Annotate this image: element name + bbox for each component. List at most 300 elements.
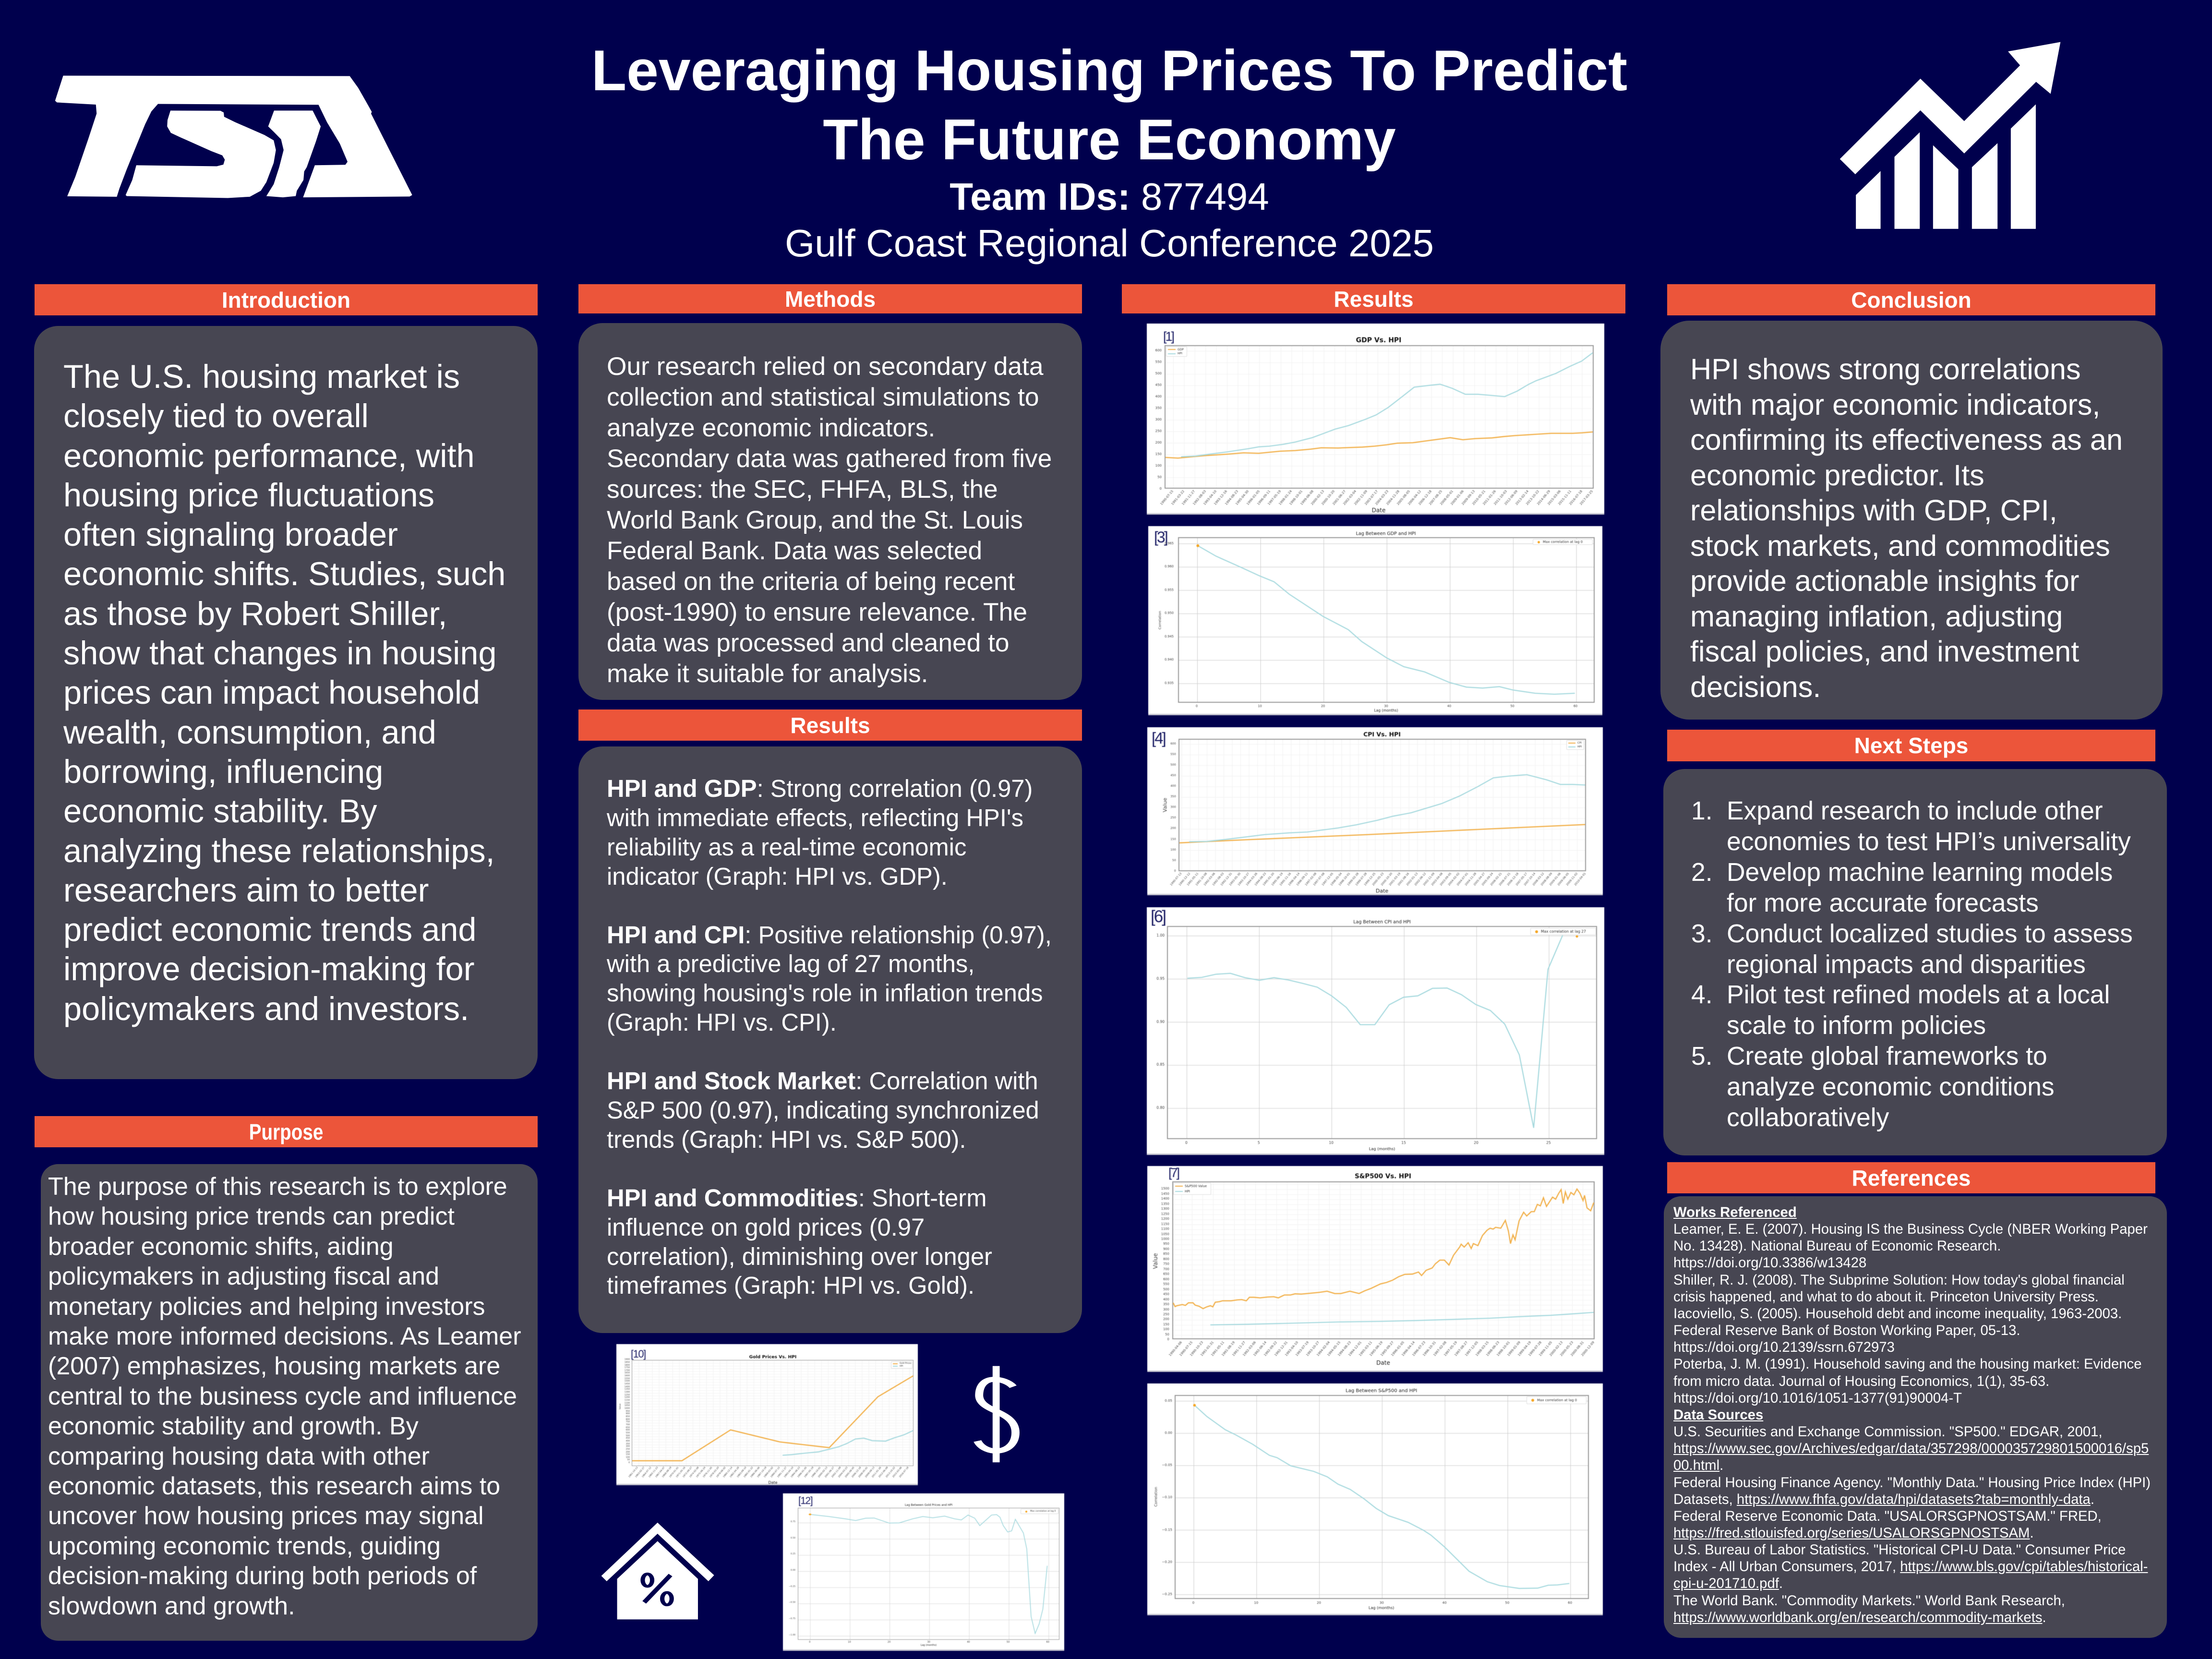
chart: lag between S&P500 and HPI: 40 [1443, 1601, 1447, 1605]
text: introduction body: prices can impact household [63, 674, 480, 711]
chart: gold prices vs HPI: 0 [628, 1462, 630, 1464]
chart: GDP vs HPI: 2002-11-09 [1353, 489, 1368, 506]
chart: lag between gold prices and HPI: 60 [1046, 1641, 1049, 1644]
chart: S&P500 vs HPI: 1993-04-10 [1285, 1340, 1299, 1357]
chart: lag between gold prices and HPI: Max correlation at lag 0 [1030, 1510, 1056, 1513]
panel: methods [578, 323, 1082, 700]
chart: CPI vs HPI: 1996-09-11 [1296, 872, 1309, 887]
chart: gold prices vs HPI: 50 [627, 1459, 630, 1461]
chart: GDP vs HPI: 2013-02-14 [1515, 489, 1529, 506]
panel: results [578, 746, 1082, 1333]
text: results body: (Graph: HPI vs. CPI). [607, 1009, 837, 1036]
chart: S&P500 vs HPI: 600 [1163, 1277, 1169, 1281]
text: results body: S&P 500 (0.97), indicating synchronized [607, 1096, 1039, 1124]
chart: lag between CPI and HPI: 0.85 [1156, 1062, 1165, 1067]
chart: lag between CPI and HPI: Lag Between CPI and HPI [1353, 919, 1411, 925]
text: references body: Datasets, https://www.fhfa.gov/data/hpi/datasets?tab=monthly-data. [1673, 1491, 2094, 1507]
chart: S&P500 vs HPI: 1991-11-27 [1232, 1340, 1246, 1357]
chart: GDP vs HPI: 450 [1155, 383, 1162, 387]
chart: S&P500 vs HPI: 1999-01-09 [1506, 1340, 1521, 1357]
chart: gold prices vs HPI: 1700 [625, 1370, 630, 1372]
chart: lag between gold prices and HPI: −0.75 [789, 1618, 795, 1620]
panel: purpose [41, 1164, 538, 1641]
chart: gold prices vs HPI: 2001-06-27 [824, 1467, 835, 1479]
chart: S&P500 vs HPI: 1990-10-23 [1190, 1340, 1204, 1357]
chart: lag between gold prices and HPI: 0.50 [791, 1537, 795, 1539]
chart: gold prices vs HPI: 700 [626, 1424, 630, 1426]
chart: gold prices vs HPI: 1100 [625, 1402, 630, 1405]
chart: S&P500 vs HPI: 1992-06-14 [1253, 1340, 1267, 1357]
text: purpose body: uncover how housing prices may signal [48, 1502, 484, 1530]
chart: GDP vs HPI: 2008-05-01 [1439, 489, 1454, 506]
text: results body: with a predictive lag of 27 months, [607, 950, 974, 977]
chart: GDP vs HPI: 2003-07-17 [1364, 489, 1379, 506]
text: methods body: sources: the SEC, FHFA, BLS, the [607, 475, 998, 504]
chart: gold prices vs HPI: 1968-08-19 [662, 1467, 673, 1479]
chart: GDP vs HPI: 2016-07-18 [1568, 489, 1583, 506]
chart: gold prices vs HPI: 1986-06-06 [750, 1467, 760, 1479]
text: methods body: collection and statistical simulations to [607, 383, 1039, 411]
panel: introduction [34, 326, 538, 1079]
chart: GDP vs HPI: 1990-07-15 [1160, 489, 1174, 506]
chart: gold prices vs HPI: 1980-12-14 [723, 1467, 733, 1479]
chart: gold prices vs HPI: Gold Prices Vs. HPI [749, 1354, 796, 1359]
chart: GDP vs HPI: 1998-01-24 [1278, 489, 1293, 506]
chart: CPI vs HPI: 1997-07-08 [1313, 872, 1326, 887]
chart: S&P500 vs HPI: 1400 [1161, 1197, 1169, 1201]
chart: lag between CPI and HPI: 1.00 [1156, 933, 1165, 938]
chart: gold prices vs HPI: 1989-03-02 [764, 1467, 774, 1479]
conference name: Gulf Coast Regional Conference 2025 [785, 222, 1434, 264]
chart: S&P500 vs HPI: 900 [1163, 1247, 1169, 1251]
chart: GDP vs HPI: 2012-06-09 [1504, 489, 1518, 506]
chart: gold prices vs HPI [616, 1344, 918, 1485]
chart: CPI vs HPI: HPI [1577, 745, 1582, 748]
chart: gold prices vs HPI: Date [768, 1480, 778, 1485]
chart: S&P500 vs HPI: 350 [1163, 1302, 1169, 1306]
chart: lag between GDP and HPI: Lag (months) [1374, 708, 1398, 712]
chart: CPI vs HPI: 1999-02-28 [1347, 872, 1359, 887]
chart: CPI vs HPI: 1993-05-30 [1229, 872, 1241, 887]
chart: gold prices vs HPI: 1979-08-02 [716, 1467, 727, 1479]
chart: lag between gold prices and HPI: 40 [967, 1641, 970, 1644]
text: results body: trends (Graph: HPI vs. S&P 500). [607, 1126, 966, 1153]
chart: GDP vs HPI: 2009-09-13 [1461, 489, 1476, 506]
text: introduction body: economic performance, with [63, 437, 475, 474]
chart: lag between gold prices and HPI: 0.75 [791, 1521, 795, 1523]
chart: lag between CPI and HPI: 15 [1401, 1141, 1406, 1145]
chart: GDP vs HPI: 1997-05-19 [1267, 489, 1282, 506]
chart: CPI vs HPI: 2002-06-12 [1414, 872, 1427, 887]
list: next steps items [1691, 797, 2133, 1132]
chart: CPI vs HPI: 0 [1174, 869, 1176, 873]
chart: S&P500 vs HPI: 1150 [1161, 1222, 1169, 1226]
chart: gold prices vs HPI: 950 [626, 1410, 630, 1413]
text: results body: HPI and Stock Market: Correlation with [607, 1067, 1038, 1094]
chart: S&P500 vs HPI: 1100 [1161, 1227, 1169, 1231]
chart: S&P500 vs HPI: 1992-09-22 [1263, 1340, 1278, 1357]
chart: GDP vs HPI: Date [1372, 507, 1385, 514]
text: purpose body: broader economic shifts, aiding [48, 1233, 394, 1261]
list: next steps items: 5. [1691, 1042, 1713, 1070]
chart: GDP vs HPI: 2002-03-04 [1343, 489, 1357, 506]
chart: lag between S&P500 and HPI: 0 [1192, 1601, 1194, 1605]
chart: CPI vs HPI: 2005-09-24 [1481, 872, 1494, 887]
text: purpose body: slowdown and growth. [48, 1592, 295, 1620]
chart: GDP vs HPI: 2015-03-06 [1547, 489, 1562, 506]
title: The Future Economy [823, 108, 1396, 172]
text: introduction body: wealth, consumption, and [63, 714, 436, 751]
chart: lag between GDP and HPI: 40 [1447, 704, 1451, 708]
text: references body: crisis happened, and what to do about it. Princeton University Press. [1673, 1289, 2099, 1305]
text: introduction body: often signaling broader [63, 516, 398, 553]
text: references body: https://fred.stlouisfed.org/series/USALORSGPNOSTSAM. [1673, 1525, 2034, 1541]
text: purpose body: policymakers in adjusting fiscal and [48, 1262, 439, 1290]
chart: GDP vs HPI: 1991-03-22 [1170, 489, 1185, 506]
chart: S&P500 vs HPI: 1999-11-05 [1538, 1340, 1553, 1357]
list: next steps items: scale to inform policies [1727, 1011, 1986, 1040]
chart: GDP vs HPI: 2000-02-13 [1310, 489, 1325, 506]
panel: references [1664, 1196, 2167, 1638]
text: results body: indicator (Graph: HPI vs. GDP). [607, 863, 948, 890]
text: references body: from micro data. Journal of Housing Economics, 1(1), 35-63. [1673, 1373, 2049, 1389]
text: conclusion body: HPI shows strong correlations [1690, 353, 2081, 385]
text: introduction body: analyzing these relationships, [63, 832, 495, 869]
chart: CPI vs HPI: 2005-04-27 [1473, 872, 1486, 887]
icon: house with percent [601, 1523, 714, 1620]
chart: gold prices vs HPI: 1750 [625, 1367, 630, 1369]
chart: CPI vs HPI: 1999-07-28 [1355, 872, 1368, 887]
chart: S&P500 vs HPI: 1991-08-19 [1221, 1340, 1236, 1357]
chart: lag between S&P500 and HPI: 0.00 [1165, 1431, 1172, 1435]
text: conclusion body [1690, 353, 2123, 703]
chart: S&P500 vs HPI: 1050 [1161, 1232, 1169, 1236]
heading: Conclusion [1667, 284, 2155, 315]
chart: lag between CPI and HPI [1147, 907, 1604, 1155]
chart: GDP vs HPI: 2014-06-29 [1536, 489, 1551, 506]
chart: CPI vs HPI: 2004-11-28 [1465, 872, 1478, 887]
chart: gold prices vs HPI: 2013-10-22 [885, 1467, 896, 1479]
chart: CPI vs HPI: 1997-02-08 [1305, 872, 1317, 887]
chart: S&P500 vs HPI: 2000-12-09 [1580, 1340, 1595, 1357]
text: methods body: World Bank Group, and the St. Louis [607, 506, 1023, 534]
text: conclusion body: economic predictor. Its [1690, 459, 1984, 492]
chart: gold prices vs HPI: 1998-10-01 [811, 1467, 821, 1479]
chart: GDP vs HPI: 100 [1155, 464, 1162, 468]
logo: TSA [55, 76, 412, 198]
chart: CPI vs HPI: 2002-01-13 [1406, 872, 1419, 887]
chart: gold prices vs HPI: 350 [626, 1443, 630, 1445]
text: purpose body: upcoming economic trends, guiding [48, 1532, 441, 1560]
text: introduction body: as those by Robert Shiller, [63, 595, 447, 632]
chart: GDP vs HPI: 2000-10-20 [1321, 489, 1335, 506]
chart: S&P500 vs HPI: 250 [1163, 1312, 1169, 1316]
chart: gold prices vs HPI: 1300 [625, 1391, 630, 1394]
chart: CPI vs HPI: 2009-11-02 [1566, 872, 1578, 887]
text: purpose body: The purpose of this research is to explore [48, 1173, 507, 1201]
chart: CPI vs HPI: 1995-01-20 [1262, 872, 1275, 887]
heading: Methods: Methods [785, 286, 876, 311]
chart: gold prices vs HPI: 1150 [625, 1399, 630, 1402]
chart: S&P500 vs HPI: 550 [1163, 1282, 1169, 1286]
text: references body: https://www.worldbank.org/en/research/commodity-markets. [1673, 1610, 2046, 1625]
title: Leveraging Housing Prices To Predict [591, 38, 1627, 103]
chart: GDP vs HPI: GDP [1178, 348, 1184, 351]
chart: S&P500 vs HPI: 450 [1163, 1292, 1169, 1296]
heading: Next Steps: Next Steps [1854, 733, 1968, 758]
chart: CPI vs HPI: 1998-05-04 [1330, 872, 1343, 887]
chart: lag between GDP and HPI: 0.940 [1165, 658, 1174, 661]
chart: GDP vs HPI: 250 [1155, 429, 1162, 433]
chart: S&P500 vs HPI: 1350 [1161, 1202, 1169, 1206]
panel: conclusion [1660, 321, 2163, 720]
chart: gold prices vs HPI: 800 [626, 1419, 630, 1421]
chart: lag between CPI and HPI: 0.95 [1156, 976, 1165, 981]
chart: lag between GDP and HPI: [3] [1154, 529, 1167, 546]
chart: CPI vs HPI: 1998-10-01 [1338, 872, 1351, 887]
chart: CPI vs HPI: 2003-04-08 [1431, 872, 1443, 887]
chart: lag between S&P500 and HPI: 0.05 [1165, 1399, 1172, 1403]
chart: CPI vs HPI: 1990-12-12 [1178, 872, 1191, 887]
chart: CPI vs HPI: 1993-10-27 [1238, 872, 1250, 887]
chart: GDP vs HPI: 2007-08-25 [1429, 489, 1443, 506]
chart: CPI vs HPI: 2008-08-09 [1540, 872, 1553, 887]
text: references body: The World Bank. "Commodity Markets." World Bank Research, [1673, 1593, 2065, 1609]
chart: GDP vs HPI: 1999-06-08 [1299, 489, 1314, 506]
chart: gold prices vs HPI: 1961-10-13 [628, 1467, 639, 1479]
list: next steps items: collaboratively [1727, 1104, 1889, 1132]
text: results body: HPI and Commodities: Short-term [607, 1184, 986, 1212]
chart: CPI vs HPI: 1992-08-03 [1212, 872, 1225, 887]
chart: gold prices vs HPI: 1971-05-16 [675, 1467, 686, 1479]
chart: S&P500 vs HPI: 1995-06-19 [1369, 1340, 1384, 1357]
chart: CPI vs HPI: 2003-09-05 [1440, 872, 1452, 887]
chart: GDP vs HPI: 2004-03-23 [1375, 489, 1389, 506]
chart: CPI vs HPI: 1994-08-23 [1254, 872, 1267, 887]
text: purpose body: comparing housing data with other [48, 1443, 430, 1470]
chart: gold prices vs HPI: 150 [626, 1454, 630, 1456]
chart: CPI vs HPI: 300 [1170, 805, 1176, 809]
chart: S&P500 vs HPI: HPI [1185, 1190, 1190, 1193]
chart: S&P500 vs HPI: 950 [1163, 1242, 1169, 1246]
chart: gold prices vs HPI: 1985-01-22 [743, 1467, 754, 1479]
chart: S&P500 vs HPI: 200 [1163, 1317, 1169, 1321]
text: introduction body: economic shifts. Studies, such [63, 555, 505, 592]
chart: CPI vs HPI: 1997-12-05 [1322, 872, 1334, 887]
chart: S&P500 vs HPI: 1998-03-15 [1475, 1340, 1490, 1357]
chart: S&P500 vs HPI: 1997-08-27 [1454, 1340, 1468, 1357]
chart: lag between S&P500 and HPI: 10 [1254, 1601, 1258, 1605]
chart: gold prices vs HPI: 2006-12-18 [852, 1467, 862, 1479]
chart: lag between CPI and HPI: 20 [1474, 1141, 1479, 1145]
text: conclusion body: managing inflation, adjusting [1690, 600, 2063, 633]
chart: CPI vs HPI: CPI Vs. HPI [1363, 731, 1401, 738]
chart: CPI vs HPI: 400 [1170, 784, 1176, 788]
chart: S&P500 vs HPI: 1990-07-15 [1179, 1340, 1193, 1357]
chart: gold prices vs HPI: 1200 [625, 1396, 630, 1399]
chart: lag between S&P500 and HPI: Lag Between S&P500 and HPI [1346, 1388, 1417, 1393]
text: methods body: data was processed and cleaned to [607, 629, 1010, 657]
chart: GDP vs HPI: 150 [1155, 452, 1162, 456]
text: purpose body: make more informed decisions. As Leamer [48, 1322, 521, 1350]
chart: lag between gold prices and HPI [783, 1493, 1064, 1651]
chart: CPI vs HPI: [4] [1152, 729, 1165, 747]
chart: CPI vs HPI: 1992-03-06 [1203, 872, 1216, 887]
chart: CPI vs HPI: Date [1376, 888, 1388, 894]
text: introduction body: predict economic trends and [63, 911, 477, 948]
chart: lag between CPI and HPI: [6] [1151, 907, 1165, 926]
chart: lag between GDP and HPI: Lag Between GDP and HPI [1356, 531, 1416, 536]
text: references body: Index - All Urban Consumers, 2017, https://www.bls.gov/cpi/tables/historical- [1673, 1559, 2148, 1575]
chart: lag between CPI and HPI: 0 [1185, 1141, 1188, 1145]
chart: GDP vs HPI [1147, 324, 1604, 515]
chart: S&P500 vs HPI: 2000-02-13 [1549, 1340, 1563, 1357]
text: references body: https://doi.org/10.1016/1051-1377(91)90004-T [1673, 1390, 1962, 1406]
chart: lag between S&P500 and HPI: Lag (months) [1369, 1606, 1394, 1610]
text: purpose body: (2007) emphasizes, housing markets are [48, 1352, 500, 1380]
chart: gold prices vs HPI: 1550 [625, 1378, 630, 1380]
text: references body: Works Referenced [1673, 1204, 1797, 1220]
text: methods body: make it suitable for analysis. [607, 660, 928, 688]
chart: gold prices vs HPI: 1965-11-23 [649, 1467, 659, 1479]
chart: CPI vs HPI: 2009-06-05 [1557, 872, 1570, 887]
heading: Results (middle): Results [1334, 286, 1414, 311]
chart: S&P500 vs HPI: 1994-08-23 [1337, 1340, 1352, 1357]
text: references body: No. 13428). National Bureau of Economic Research. [1673, 1238, 2001, 1254]
chart: gold prices vs HPI: 650 [626, 1427, 630, 1429]
chart: gold prices vs HPI: 250 [626, 1448, 630, 1451]
text: introduction body: The U.S. housing market is [63, 358, 460, 395]
text: conclusion body: decisions. [1690, 670, 1821, 703]
chart: GDP vs HPI: 2009-01-06 [1450, 489, 1465, 506]
chart: lag between GDP and HPI: 0.960 [1165, 565, 1174, 568]
chart: gold prices vs HPI: 1982-04-28 [730, 1467, 740, 1479]
text: references body: Leamer, E. E. (2007). Housing IS the Business Cycle (NBER Working Paper [1673, 1221, 2148, 1237]
heading: Results (middle) [1122, 284, 1625, 313]
chart: GDP vs HPI: 2006-04-12 [1407, 489, 1422, 506]
text: methods body: (post-1990) to ensure relevance. The [607, 598, 1027, 626]
text: results body: HPI and GDP: Strong correlation (0.97) [607, 775, 1033, 802]
text: purpose body: economic stability and growth. By [48, 1412, 419, 1440]
chart: lag between GDP and HPI: 0.950 [1165, 611, 1174, 615]
text: methods body: analyze economic indicators. [607, 414, 935, 442]
text: methods body: Our research relied on secondary data [607, 352, 1044, 381]
chart: gold prices vs HPI: 400 [626, 1440, 630, 1443]
chart: gold prices vs HPI: 2011-01-26 [872, 1467, 882, 1479]
text: introduction body: show that changes in housing [63, 635, 497, 672]
chart: lag between S&P500 and HPI: Max correlation at lag 0 [1537, 1398, 1577, 1402]
chart: lag between gold prices and HPI: Lag Between Gold Prices and HPI [905, 1503, 952, 1506]
chart: lag between S&P500 and HPI: 30 [1380, 1601, 1384, 1605]
chart: gold prices vs HPI: 1991-11-27 [777, 1467, 788, 1479]
chart: S&P500 vs HPI: 850 [1163, 1252, 1169, 1256]
chart: gold prices vs HPI: 1972-09-27 [683, 1467, 693, 1479]
text: purpose body: central to the business cycle and influence [48, 1382, 517, 1410]
chart: gold prices vs HPI: 2005-08-05 [845, 1467, 855, 1479]
chart: CPI vs HPI: 2001-03-19 [1389, 872, 1402, 887]
text: references body: Shiller, R. J. (2008). The Subprime Solution: How today's global financial [1673, 1272, 2125, 1288]
heading: Introduction [35, 284, 538, 315]
chart: gold prices vs HPI: 1975-06-24 [696, 1467, 706, 1479]
heading: Conclusion: Conclusion [1851, 287, 1972, 312]
chart: gold prices vs HPI: 1978-03-20 [709, 1467, 720, 1479]
chart: lag between GDP and HPI: 0.955 [1165, 588, 1174, 592]
text: references body: Iacoviello, S. (2005). Household debt and income inequality, 1963-2003. [1673, 1306, 2122, 1322]
chart: S&P500 vs HPI: 1997-02-08 [1432, 1340, 1447, 1357]
text: results body: timeframes (Graph: HPI vs. Gold). [607, 1272, 974, 1299]
chart: S&P500 vs HPI: 1450 [1161, 1192, 1169, 1196]
chart: CPI vs HPI: 2001-08-16 [1397, 872, 1410, 887]
text: methods body: Secondary data was gathered from five [607, 445, 1052, 473]
chart: gold prices vs HPI: 1050 [625, 1405, 630, 1407]
text: references body: U.S. Bureau of Labor Statistics. "Historical CPI-U Data." Consumer Price [1673, 1542, 2126, 1558]
text: purpose body: decision-making during both periods of [48, 1562, 477, 1590]
chart: gold prices vs HPI: 100 [626, 1456, 630, 1459]
text: purpose body: how housing price trends can predict [48, 1202, 455, 1230]
chart: S&P500 vs HPI: 1500 [1161, 1187, 1169, 1190]
chart: GDP vs HPI: 2013-10-22 [1525, 489, 1540, 506]
chart: lag between gold prices and HPI: 30 [927, 1641, 930, 1644]
chart: S&P500 vs HPI: 1999-07-28 [1527, 1340, 1542, 1357]
heading: Results (left) [578, 709, 1082, 741]
chart: gold prices vs HPI: 750 [626, 1421, 630, 1423]
chart: lag between S&P500 and HPI: −0.10 [1162, 1495, 1172, 1499]
chart: S&P500 vs HPI: 1999-04-19 [1517, 1340, 1532, 1357]
chart: S&P500 vs HPI: 1000 [1161, 1237, 1169, 1241]
chart: S&P500 vs HPI: 1998-06-23 [1485, 1340, 1500, 1357]
chart: lag between S&P500 and HPI [1147, 1383, 1603, 1615]
chart: CPI vs HPI: 2007-10-14 [1524, 872, 1536, 887]
list: next steps items: for more accurate forecasts [1727, 889, 2039, 917]
chart: GDP vs HPI: 2006-12-18 [1418, 489, 1432, 506]
chart: GDP vs HPI: 2010-05-21 [1471, 489, 1486, 506]
text: references body: cpi-u-201710.pdf. [1673, 1575, 1783, 1591]
chart: CPI vs HPI: 600 [1170, 742, 1176, 745]
chart: gold prices vs HPI: [10] [631, 1348, 646, 1360]
list: next steps items: 2. [1691, 858, 1713, 887]
chart: gold prices vs HPI: 2016-07-18 [899, 1467, 909, 1479]
text: purpose body [48, 1173, 521, 1620]
chart: S&P500 vs HPI: 1994-02-04 [1316, 1340, 1331, 1357]
chart: S&P500 vs HPI: 700 [1163, 1267, 1169, 1271]
chart: GDP vs HPI: GDP Vs. HPI [1356, 337, 1401, 344]
chart: GDP vs HPI: [1] [1163, 329, 1173, 344]
text: references body: Federal Reserve Economic Data. "USALORSGPNOSTSAM." FRED, [1673, 1508, 2102, 1524]
chart: CPI vs HPI: 1991-05-11 [1187, 872, 1200, 887]
text: introduction body: housing price fluctuations [63, 477, 434, 514]
text: introduction body: policymakers and investors. [63, 990, 469, 1027]
chart: lag between CPI and HPI: 10 [1329, 1141, 1334, 1145]
heading: Results (left): Results [790, 712, 870, 737]
chart: S&P500 vs HPI: 1996-07-23 [1411, 1340, 1426, 1357]
chart: S&P500 vs HPI: 1991-05-11 [1211, 1340, 1225, 1357]
chart: lag between gold prices and HPI: −1.00 [789, 1634, 795, 1636]
chart: lag between S&P500 and HPI: 50 [1505, 1601, 1509, 1605]
chart: gold prices vs HPI: 2009-09-13 [865, 1467, 876, 1479]
list: next steps items: Expand research to include other [1727, 797, 2103, 825]
text: references body: Federal Reserve Bank of Boston Working Paper, 05-13. [1673, 1322, 2020, 1338]
heading: References: References [1851, 1166, 1971, 1190]
chart: CPI vs HPI: 350 [1170, 795, 1176, 798]
chart: CPI vs HPI: 100 [1170, 848, 1176, 852]
chart: lag between GDP and HPI: 50 [1510, 704, 1515, 708]
chart: S&P500 vs HPI: 1994-05-15 [1327, 1340, 1341, 1357]
text: references body: Poterba, J. M. (1991). Household saving and the housing market: Evidence [1673, 1356, 2142, 1372]
chart: S&P500 vs HPI: Date [1376, 1359, 1390, 1366]
chart: GDP vs HPI: 2017-03-25 [1579, 489, 1594, 506]
chart: gold prices vs HPI: 850 [626, 1416, 630, 1418]
text: references body: U.S. Securities and Exchange Commission. "SP500." EDGAR, 2001, [1673, 1424, 2103, 1440]
